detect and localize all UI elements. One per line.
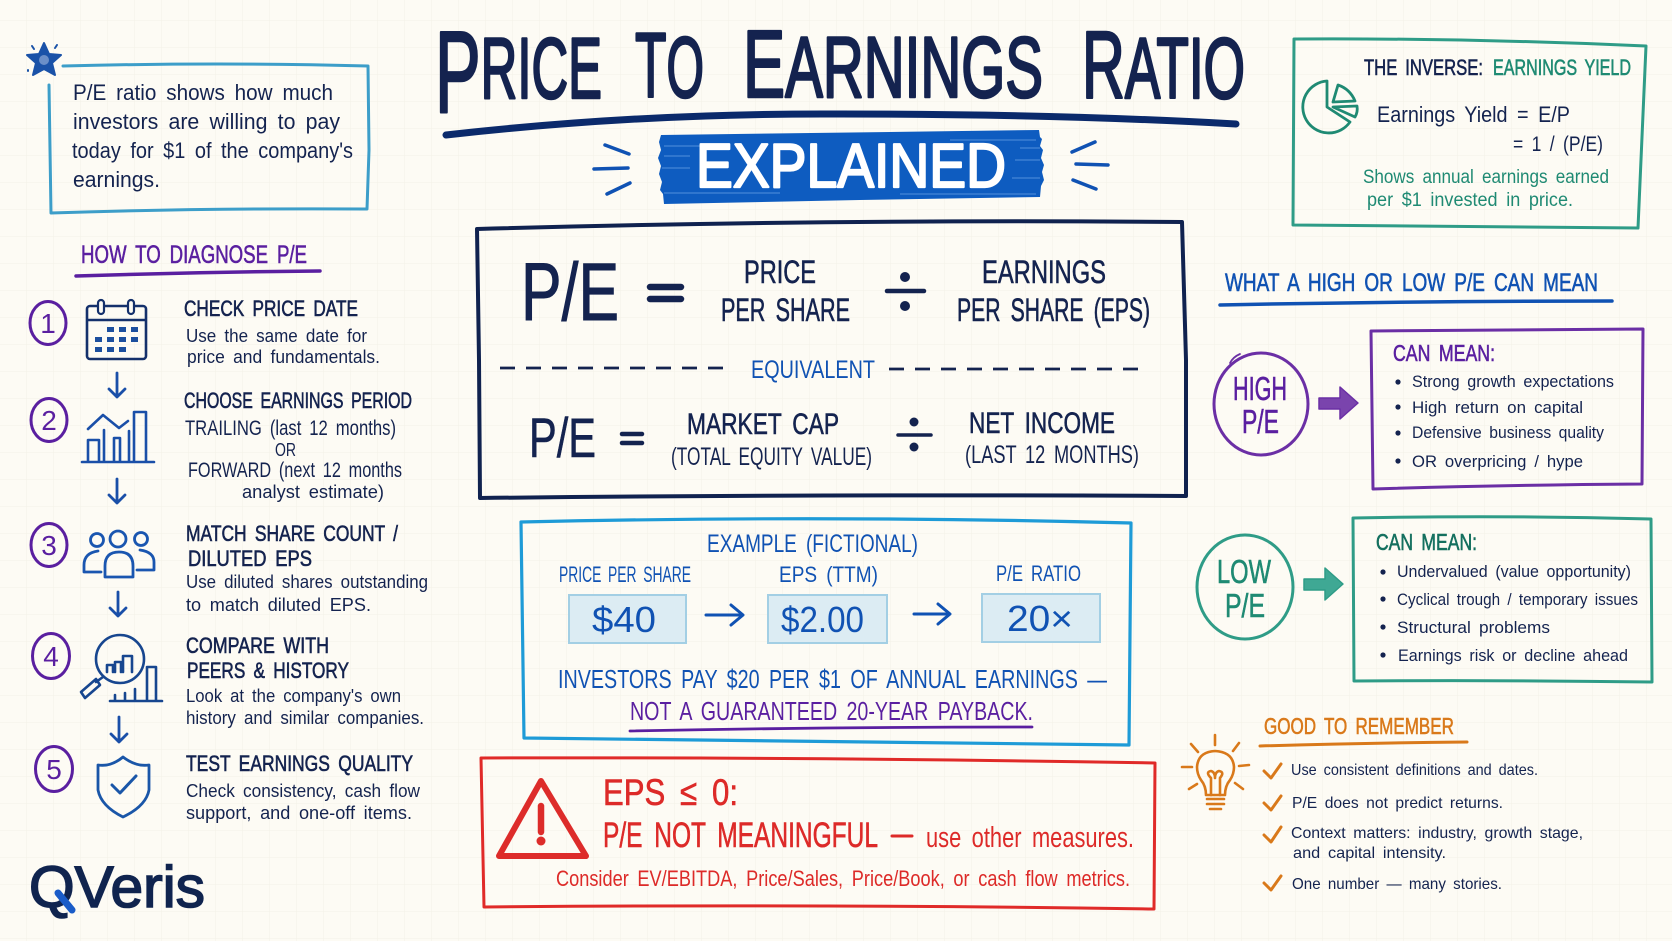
panel: example: EXAMPLE (FICTIONAL) — [707, 530, 918, 558]
value: price — [569, 595, 686, 643]
step 4: PEERS & HISTORY — [187, 658, 349, 683]
panel: low can mean: Structural problems — [1397, 618, 1550, 637]
panel: example: EPS (TTM) — [779, 562, 878, 587]
panel: earnings yield — [1293, 39, 1646, 228]
panel: warning: Consider EV/EBITDA, Price/Sales, Price/Book, or cash flow metrics. — [556, 866, 1130, 891]
alternative formula: (LAST 12 MONTHS) — [965, 441, 1139, 469]
title: EARNINGS — [743, 11, 1043, 118]
arrow 3 to 4 — [110, 592, 126, 616]
step 1 — [30, 296, 380, 367]
callout: definition: P/E ratio shows how much — [73, 80, 333, 105]
panel: example: P/E RATIO — [996, 561, 1081, 586]
icon: light bulb — [1182, 735, 1249, 809]
number 5 — [36, 746, 72, 792]
panel: high can mean: Strong growth expectations — [1412, 372, 1614, 391]
low P/E circle — [1197, 535, 1293, 639]
high P/E circle — [1214, 353, 1308, 455]
heading: how to diagnose — [76, 241, 320, 276]
arrow: low — [1304, 568, 1343, 600]
icon: people — [84, 531, 154, 577]
main formula — [521, 247, 1150, 338]
alternative formula: P/E — [529, 406, 596, 469]
step 3: to match diluted EPS. — [186, 595, 371, 615]
panel: earnings yield: per $1 invested in price. — [1367, 190, 1573, 211]
value: price: $40 — [592, 599, 656, 640]
panel: earnings yield: THE INVERSE: — [1364, 55, 1483, 80]
step 2: analyst estimate) — [242, 482, 384, 502]
panel: formula — [477, 221, 1186, 498]
panel: high can mean: Defensive business quality — [1412, 423, 1604, 442]
number 4 — [32, 634, 70, 678]
alternative formula: NET INCOME — [969, 407, 1115, 440]
title: P — [435, 7, 481, 137]
panel: earnings yield: = 1 / (P/E) — [1513, 133, 1603, 156]
panel: warning — [481, 758, 1155, 909]
number 5: 5 — [46, 754, 62, 785]
number 2: 2 — [41, 405, 57, 436]
step 4: history and similar companies. — [186, 708, 424, 728]
title: TO — [635, 15, 704, 117]
heading: good to remember: GOOD TO REMEMBER — [1264, 713, 1454, 739]
panel: high can mean: OR overpricing / hype — [1412, 452, 1583, 471]
panel: example: NOT A GUARANTEED 20-YEAR PAYBACK. — [630, 696, 1033, 726]
arrow 4 to 5 — [111, 717, 127, 742]
heading: how to diagnose: HOW TO DIAGNOSE P/E — [81, 241, 307, 269]
heading: high or low — [1220, 269, 1612, 305]
icon: magnifier with chart — [81, 635, 162, 701]
callout: definition — [27, 43, 369, 213]
callout: definition: earnings. — [73, 167, 160, 192]
step 5 — [36, 746, 421, 823]
panel: high can mean: CAN MEAN: — [1393, 340, 1495, 366]
alternative formula: MARKET CAP — [687, 408, 839, 441]
step 2 — [31, 388, 412, 502]
checklist: Context matters: industry, growth stage, — [1291, 825, 1583, 842]
arrow — [706, 605, 743, 625]
main formula: PER SHARE (EPS) — [957, 292, 1150, 328]
callout: definition: today for $1 of the company's — [72, 138, 353, 163]
panel: example — [521, 519, 1131, 745]
number 4: 4 — [43, 641, 59, 672]
alternative formula — [529, 406, 1139, 471]
panel: warning: EPS ≤ 0: — [603, 772, 738, 813]
value: ratio — [982, 594, 1100, 642]
panel: low can mean: Cyclical trough / temporary issues — [1397, 590, 1638, 609]
number 2 — [31, 398, 67, 442]
checklist: Use consistent definitions and dates. — [1291, 762, 1538, 779]
arrow 1 to 2 — [109, 373, 125, 397]
title — [435, 7, 1245, 137]
step 4 — [32, 633, 424, 728]
step 3: DILUTED EPS — [188, 546, 312, 571]
low P/E circle: LOW — [1217, 553, 1272, 590]
checklist: One number — many stories. — [1292, 876, 1502, 893]
step 4: Look at the company's own — [186, 686, 401, 706]
title: RATIO — [1082, 12, 1245, 119]
alternative formula: (TOTAL EQUITY VALUE) — [671, 443, 872, 471]
high P/E circle: HIGH — [1233, 370, 1287, 407]
step 2: OR — [275, 440, 296, 460]
panel: low can mean: CAN MEAN: — [1376, 529, 1477, 555]
low P/E circle: P/E — [1225, 587, 1265, 624]
banner: explained: EXPLAINED — [696, 132, 1006, 201]
step 5: TEST EARNINGS QUALITY — [186, 751, 413, 776]
checklist: and capital intensity. — [1293, 845, 1446, 862]
panel: good to remember — [1182, 713, 1583, 893]
icon: bar chart — [82, 412, 154, 462]
value: ratio: 20× — [1007, 598, 1073, 639]
step 3: Use diluted shares outstanding — [186, 572, 428, 592]
title underline — [446, 114, 1236, 135]
main formula: EARNINGS — [982, 254, 1106, 290]
number 3: 3 — [41, 530, 57, 561]
number 3 — [31, 524, 67, 566]
callout: definition: investors are willing to pay — [73, 109, 340, 134]
step 1: Use the same date for — [186, 326, 367, 346]
number 1 — [30, 302, 66, 344]
icon: star — [27, 43, 61, 75]
panel: low can mean — [1353, 517, 1652, 682]
panel: warning: use other measures. — [926, 822, 1134, 854]
panel: warning: P/E NOT MEANINGFUL — [603, 816, 878, 855]
panel: earnings yield: Shows annual earnings earned — [1363, 167, 1609, 188]
rays around banner — [594, 142, 1108, 194]
icon: pie chart — [1303, 81, 1357, 133]
checklist: P/E does not predict returns. — [1292, 795, 1503, 812]
step 1: CHECK PRICE DATE — [184, 296, 358, 321]
step 5: support, and one-off items. — [186, 803, 412, 823]
equivalent divider: EQUIVALENT — [751, 356, 875, 384]
panel: low can mean: Undervalued (value opportunity) — [1397, 562, 1631, 581]
panel: high can mean: High return on capital — [1412, 398, 1583, 417]
icon: calendar — [87, 300, 146, 359]
icon: shield — [98, 757, 149, 817]
heading: good to remember — [1260, 713, 1467, 746]
logo: QVeris: QVeris — [29, 855, 205, 920]
checklist — [1264, 762, 1583, 893]
value: eps — [768, 595, 887, 643]
step 5: Check consistency, cash flow — [186, 781, 421, 801]
panel: earnings yield: Earnings Yield = E/P — [1377, 102, 1570, 127]
panel: low can mean: Earnings risk or decline ahead — [1398, 646, 1628, 665]
step 2: CHOOSE EARNINGS PERIOD — [184, 388, 412, 413]
title: RICE — [481, 21, 602, 117]
step 4: COMPARE WITH — [186, 633, 329, 658]
icon: warning triangle — [499, 781, 586, 856]
main formula: PER SHARE — [721, 292, 850, 328]
arrow — [914, 604, 950, 624]
panel: example: INVESTORS PAY $20 PER $1 OF ANNUAL EARNINGS — — [558, 664, 1107, 694]
step 1: price and fundamentals. — [187, 347, 380, 367]
panel: example: PRICE PER SHARE — [559, 562, 691, 587]
value: eps: $2.00 — [781, 599, 864, 640]
high P/E circle: P/E — [1242, 403, 1279, 440]
number 1: 1 — [40, 308, 56, 339]
arrow 2 to 3 — [109, 479, 125, 503]
main formula: PRICE — [744, 254, 816, 290]
step 2: FORWARD (next 12 months — [188, 459, 402, 482]
arrow: high — [1319, 387, 1358, 419]
panel: high can mean — [1371, 329, 1643, 489]
step 3 — [31, 521, 428, 615]
step 2: TRAILING (last 12 months) — [185, 417, 396, 440]
step 3: MATCH SHARE COUNT / — [186, 521, 399, 546]
main formula: P/E — [521, 247, 619, 338]
